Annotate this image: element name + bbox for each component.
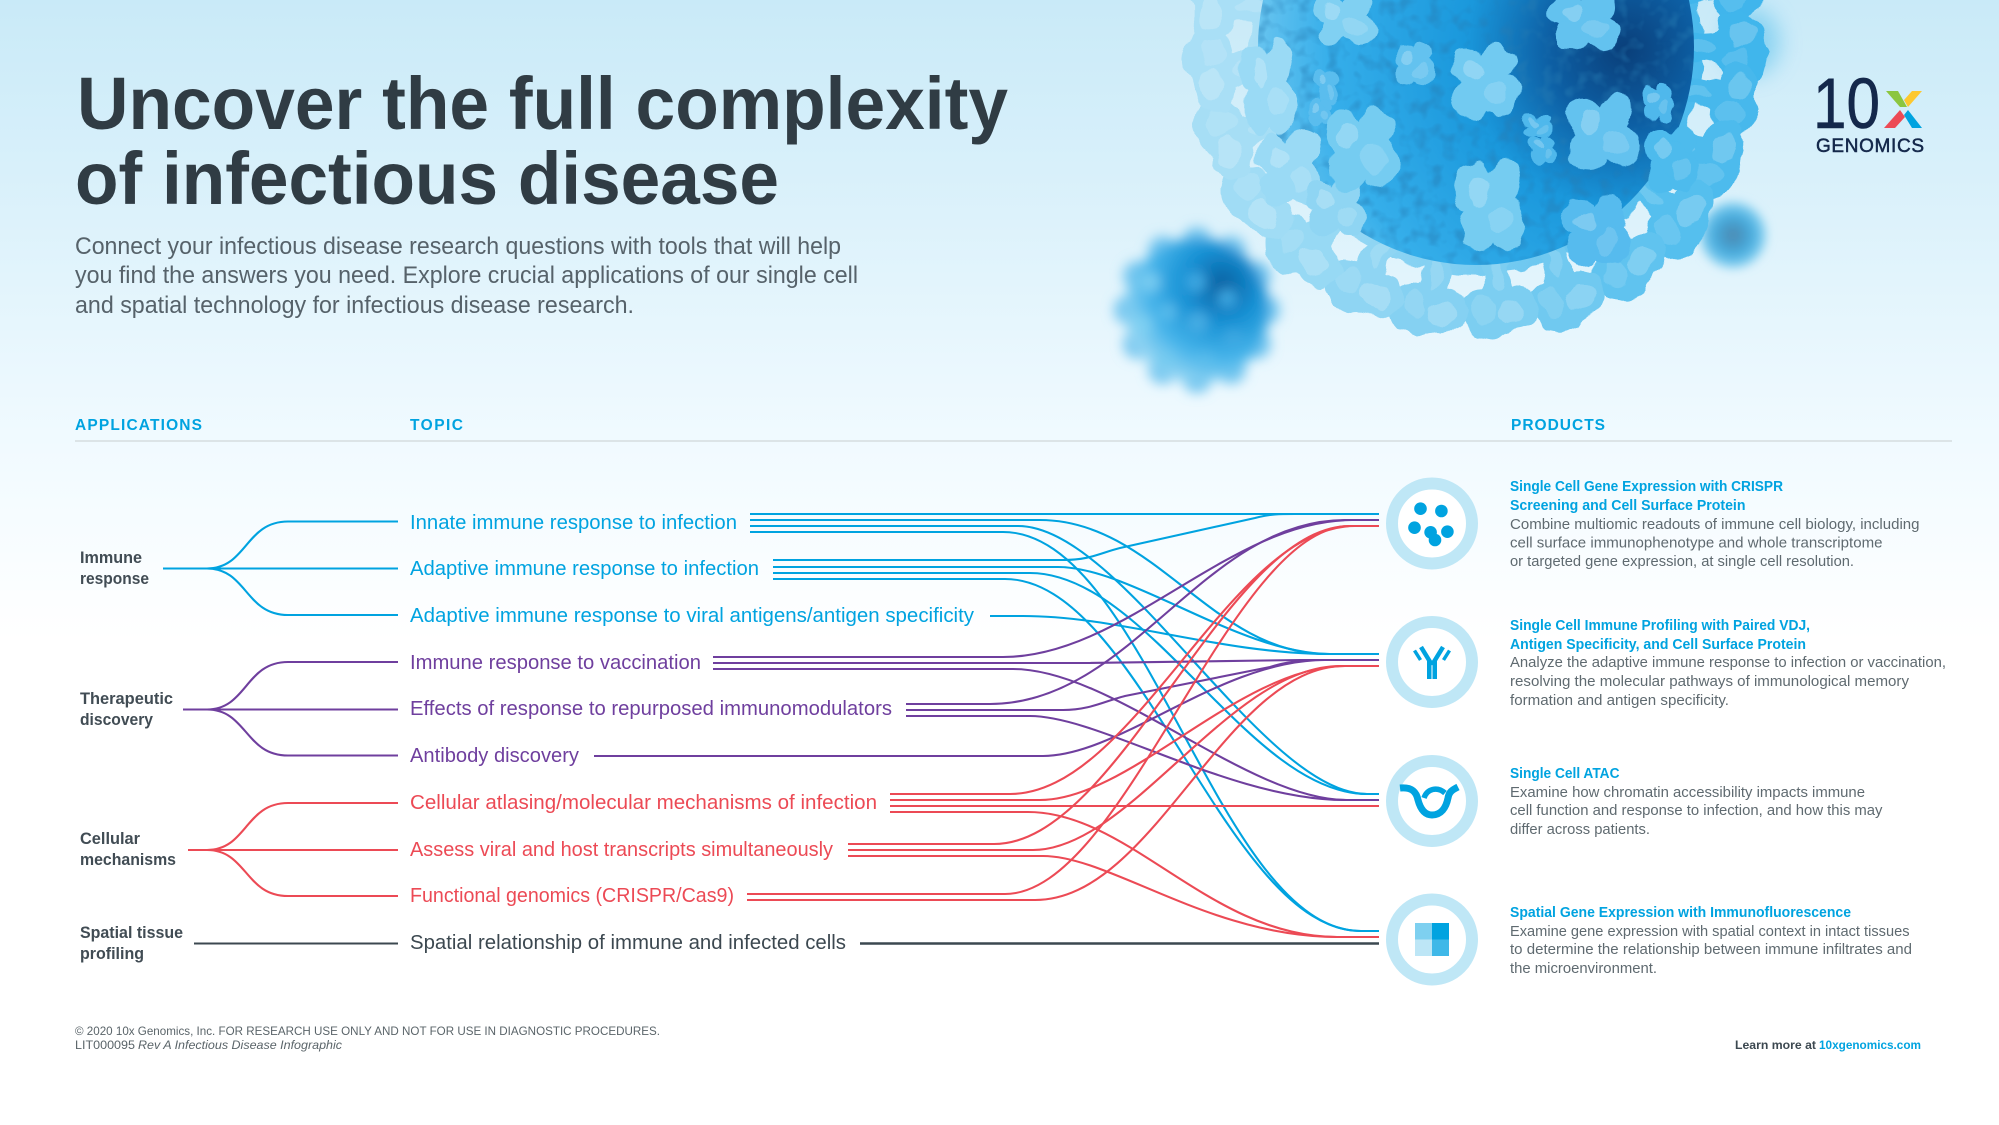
product: ATAC text	[1510, 766, 1883, 838]
logo wordmark: GENOMICS	[1816, 136, 1924, 157]
footer: legal text: © 2020 10x Genomics, Inc. FOR RESEARCH USE ONLY AND NOT FOR USE IN DIAGNOSTIC PROCEDURES.	[75, 1024, 660, 1038]
connectors: cellular mechanisms topics	[747, 526, 1379, 937]
product: immune profiling text: Single Cell Immune Profiling with Paired VDJ,	[1510, 618, 1810, 634]
label: spatial tissue profiling: Spatial tissue	[80, 923, 183, 942]
heading: topic: TOPIC	[410, 417, 463, 434]
intro text: and spatial technology for infectious disease research.	[75, 292, 634, 319]
topic: spatial relationship: Spatial relationship of immune and infected cells	[410, 932, 846, 954]
product: gene expression text: Combine multiomic readouts of immune cell biology, including	[1510, 517, 1920, 533]
connector: spatial topic	[860, 942, 1379, 945]
illustration: blurred glow	[1724, 8, 1780, 76]
footer: learn more: 10xgenomics.com	[1819, 1038, 1921, 1052]
product: immune profiling text: Antigen Specificity, and Cell Surface Protein	[1510, 637, 1806, 653]
product: ATAC text: cell function and response to infection, and how this may	[1510, 803, 1883, 819]
connector lines: topics to products	[594, 514, 1379, 944]
tree: cellular mechanisms	[188, 803, 398, 896]
footer: learn more	[1735, 1038, 1921, 1052]
product: gene expression text	[1510, 479, 1920, 570]
label: therapeutic discovery: Therapeutic	[80, 689, 173, 708]
footer: legal text: Rev A Infectious Disease Infographic	[138, 1038, 342, 1052]
applications tree connectors	[163, 522, 398, 944]
topic labels	[410, 512, 974, 954]
illustration: surface spikes	[1241, 0, 1700, 267]
label: spatial tissue profiling	[80, 923, 183, 963]
logo x mark	[1884, 91, 1922, 128]
topic: innate immune response: Innate immune response to infection	[410, 512, 737, 534]
illustration: small blurred virus	[1700, 202, 1766, 268]
column headings	[75, 417, 1952, 441]
product: immune profiling text: Analyze the adaptive immune response to infection or vaccination,	[1510, 655, 1946, 671]
topic: functional genomics: Functional genomics (CRISPR/Cas9)	[410, 885, 734, 907]
illustration: body surface texture	[1258, 0, 1694, 265]
product icon: chromatin ribbon	[1392, 761, 1472, 841]
label: immune response: Immune	[80, 548, 142, 567]
topic: viral antigens: Adaptive immune response to viral antigens/antigen specificity	[410, 605, 974, 627]
illustration: virus body	[1258, 0, 1694, 265]
tree: spatial tissue profiling	[194, 942, 398, 945]
illustration: coronavirus particles	[1114, 0, 1780, 393]
product icon: gene expression cells	[1392, 484, 1472, 564]
label: therapeutic discovery	[80, 689, 173, 729]
logo: 10x Genomics	[1813, 65, 1924, 157]
label: immune response	[80, 548, 149, 588]
intro text	[75, 233, 858, 319]
footer: learn more: Learn more at	[1735, 1038, 1816, 1052]
footer: legal text: LIT000095	[75, 1038, 135, 1052]
product: spatial text: Examine gene expression with spatial context in intact tissues	[1510, 924, 1910, 940]
tree: immune response	[163, 522, 398, 615]
title	[75, 62, 1008, 220]
heading: products: PRODUCTS	[1511, 417, 1605, 434]
label: spatial tissue profiling: profiling	[80, 944, 144, 963]
illustration: spike underlay ring	[1250, 0, 1702, 273]
topic: antibody discovery: Antibody discovery	[410, 745, 579, 767]
product: spatial text: to determine the relationship between immune infiltrates and	[1510, 942, 1912, 958]
logo numerals: 10	[1813, 65, 1880, 144]
product: immune profiling text: resolving the molecular pathways of immunological memory	[1510, 674, 1910, 690]
product: spatial text: Spatial Gene Expression with Immunofluorescence	[1510, 905, 1851, 921]
application labels	[80, 548, 183, 963]
product: immune profiling text	[1510, 618, 1946, 709]
title: Uncover the full complexity	[77, 62, 1008, 145]
product: gene expression text: Screening and Cell Surface Protein	[1510, 498, 1746, 514]
product icon: spatial squares	[1392, 900, 1472, 980]
product: ATAC text: Single Cell ATAC	[1510, 766, 1620, 782]
product: spatial text: the microenvironment.	[1510, 961, 1657, 977]
footer: legal text	[75, 1024, 660, 1052]
product: spatial text	[1510, 905, 1912, 977]
product: gene expression text: Single Cell Gene Expression with CRISPR	[1510, 479, 1783, 495]
intro text: Connect your infectious disease research questions with tools that will help	[75, 233, 841, 260]
heading: applications: APPLICATIONS	[75, 417, 202, 434]
product: ATAC text: differ across patients.	[1510, 822, 1650, 838]
illustration: rim spikes	[1180, 0, 1770, 344]
product icon: antibody	[1392, 622, 1472, 702]
connectors: immune response topics	[750, 514, 1379, 931]
topic: viral and host transcripts: Assess viral and host transcripts simultaneously	[410, 839, 833, 861]
product: gene expression text: cell surface immunophenotype and whole transcriptome	[1510, 536, 1882, 552]
product: immune profiling text: formation and antigen specificity.	[1510, 693, 1729, 709]
topic: cellular atlasing: Cellular atlasing/molecular mechanisms of infection	[410, 792, 877, 814]
intro text: you find the answers you need. Explore crucial applications of our single cell	[75, 262, 858, 289]
product: gene expression text: or targeted gene expression, at single cell resolution.	[1510, 554, 1854, 570]
label: therapeutic discovery: discovery	[80, 710, 153, 729]
topic: adaptive immune response: Adaptive immune response to infection	[410, 558, 759, 580]
topic: immunomodulators: Effects of response to repurposed immunomodulators	[410, 698, 892, 720]
product: ATAC text: Examine how chromatin accessibility impacts immune	[1510, 785, 1865, 801]
illustration: large blurred virus	[1114, 227, 1280, 393]
label: cellular mechanisms: mechanisms	[80, 850, 176, 869]
label: cellular mechanisms	[80, 829, 176, 869]
title: of infectious disease	[75, 137, 779, 220]
tree: therapeutic discovery	[183, 662, 398, 756]
topic: vaccination: Immune response to vaccination	[410, 652, 701, 674]
connectors: therapeutic discovery topics	[594, 520, 1379, 800]
label: cellular mechanisms: Cellular	[80, 829, 140, 848]
label: immune response: response	[80, 569, 149, 588]
